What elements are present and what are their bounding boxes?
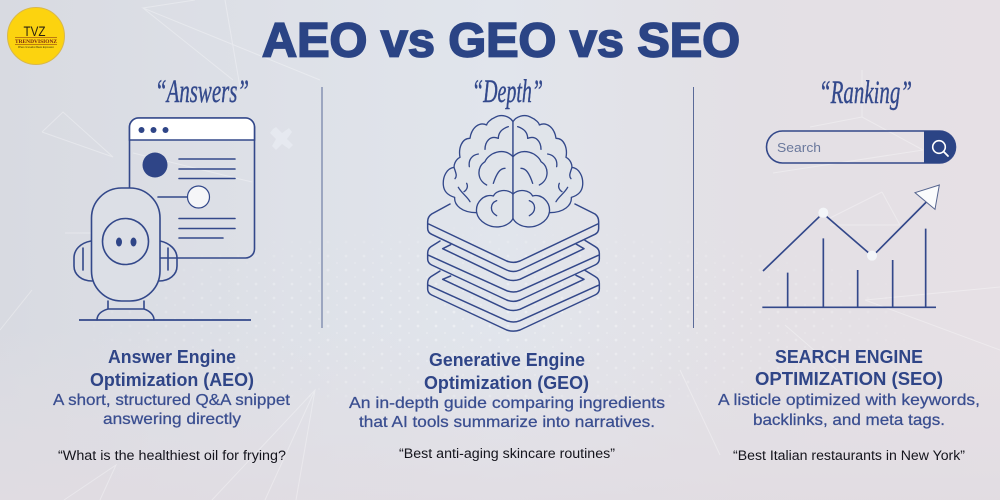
description: AEO [53, 392, 291, 428]
divider right [692, 87, 694, 328]
icon: search bar [766, 131, 956, 163]
description: GEO: An in-depth guide comparing ingredients [349, 395, 665, 412]
heading: SEO: OPTIMIZATION (SEO) [755, 369, 943, 389]
panel: AEO [53, 74, 291, 463]
description: SEO: backlinks, and meta tags. [753, 412, 945, 429]
icon: brain on stacked layers [428, 116, 599, 331]
description: GEO: that AI tools summarize into narratives. [359, 414, 655, 431]
logo: Trendvisionz badge [8, 8, 64, 64]
heading: SEO: SEARCH ENGINE [775, 347, 923, 367]
description: AEO: answering directly [103, 411, 241, 428]
script label: Depth: “Depth” [472, 74, 543, 110]
heading: AEO [90, 347, 254, 390]
panel: GEO [349, 74, 665, 461]
heading: GEO [424, 350, 589, 393]
logo: Trendvisionz badge: TVZ [24, 23, 46, 39]
panel: SEO [718, 75, 980, 463]
icon: robot with answer window [74, 118, 254, 320]
description: SEO [718, 392, 980, 429]
logo: Trendvisionz badge: TRENDVISIONZ [15, 39, 58, 45]
heading: GEO: Optimization (GEO) [424, 373, 589, 393]
heading: AEO: Optimization (AEO) [90, 370, 254, 390]
logo: Trendvisionz badge: Where Innovation Meets Expression [18, 45, 54, 49]
script label: Answers: “Answers” [155, 74, 249, 110]
heading: SEO [755, 347, 943, 389]
description: SEO: A listicle optimized with keywords, [718, 392, 980, 409]
script label: Ranking: “Ranking” [819, 75, 912, 111]
divider left [321, 87, 323, 328]
title: AEO vs GEO vs SEO [262, 14, 740, 68]
chart: rising line over bars [762, 185, 939, 307]
heading: GEO: Generative Engine [429, 350, 585, 370]
example query: AEO: “What is the healthiest oil for frying? [58, 448, 286, 463]
icon: search bar: Search [777, 141, 821, 155]
heading: AEO: Answer Engine [108, 347, 236, 367]
description: GEO [349, 395, 665, 431]
example query: GEO: “Best anti-aging skincare routines” [399, 446, 615, 461]
example query: SEO: “Best Italian restaurants in New York” [733, 448, 965, 463]
description: AEO: A short, structured Q&A snippet [53, 392, 291, 409]
